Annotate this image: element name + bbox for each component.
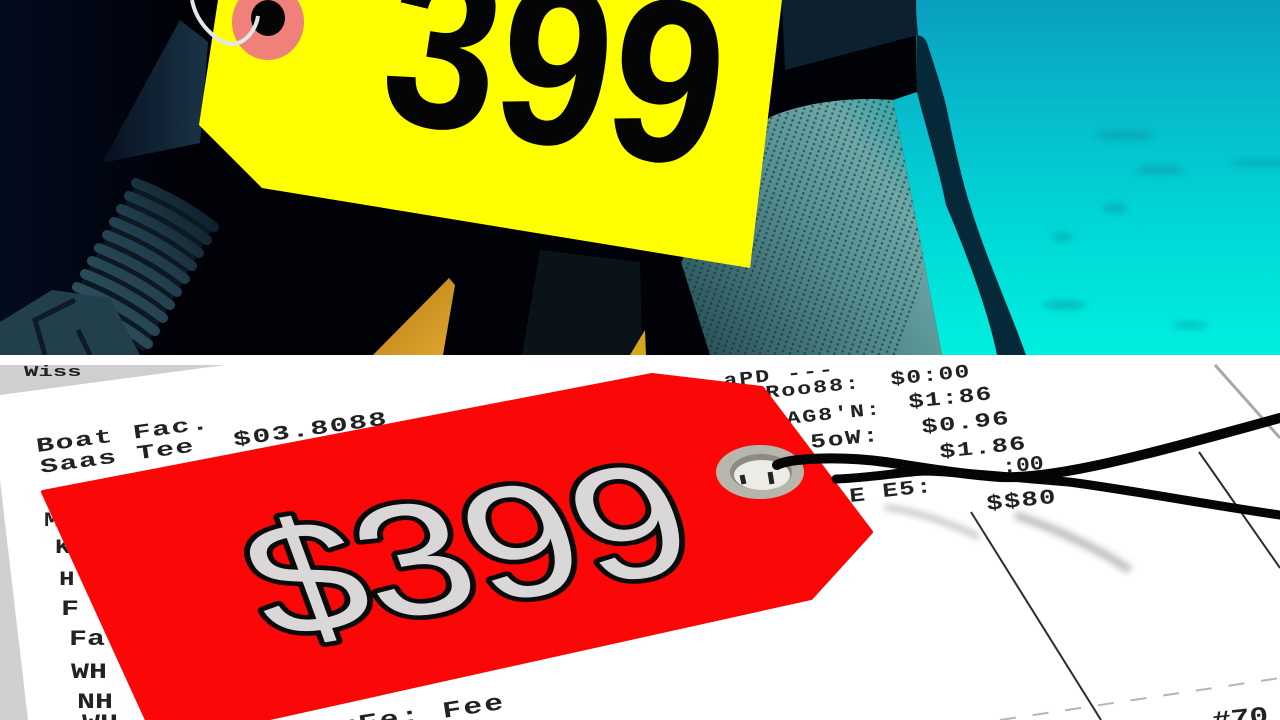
tag eyelet: [192, 0, 304, 60]
receipt text: Boat Fac.: [35, 412, 212, 458]
red price tag: [43, 375, 1280, 720]
receipt text: Fa: [69, 627, 105, 652]
tank strap top: [782, 0, 918, 70]
receipt text: AG8'N:: [786, 400, 883, 430]
receipt text: Saas Tee $03.8088: [39, 408, 389, 479]
tag price text: $399: [221, 428, 715, 673]
receipt text: $$80: [985, 486, 1058, 517]
receipt text: M: [44, 510, 60, 532]
receipt text: :00: [1001, 453, 1045, 479]
receipt text: $0:00: [889, 361, 972, 391]
receipt text: WH: [71, 660, 107, 685]
receipt text: $0.96: [920, 408, 1011, 440]
left shadow tint: [0, 0, 180, 355]
yellow accent on vest: [373, 278, 455, 355]
corrugated regulator hose: [0, 183, 214, 355]
yellow price tag: [192, 0, 782, 268]
receipt text: E: [848, 484, 866, 508]
shoulder pad: [102, 20, 208, 163]
receipt text: Roo88:: [765, 374, 862, 404]
receipt text: H: [59, 569, 75, 591]
sea floor specks: [1043, 131, 1280, 328]
weave vest: [522, 250, 642, 355]
receipt text: aPD ---: [723, 361, 836, 392]
receipt text: F: [61, 597, 79, 622]
receipt lines: [971, 365, 1280, 720]
receipt text: $1:86: [907, 383, 994, 414]
tag string: [777, 418, 1280, 515]
scuba tank: [681, 99, 942, 355]
black hose: [917, 35, 1026, 355]
receipt text: [24, 361, 1270, 720]
receipt text: NH: [77, 690, 113, 715]
tag shadow: [885, 507, 1130, 570]
panel: underwater diver photo: [0, 0, 1280, 355]
tag eyelet: [716, 445, 804, 499]
receipt text: $1.86: [938, 433, 1028, 465]
receipt text: E5:: [881, 475, 934, 503]
receipt text: Wiss: [24, 364, 82, 380]
panel: fee receipt: [0, 355, 1280, 720]
receipt text: K: [55, 537, 71, 559]
diver dark body: [0, 0, 942, 355]
receipt text: 5oW:: [809, 424, 881, 454]
